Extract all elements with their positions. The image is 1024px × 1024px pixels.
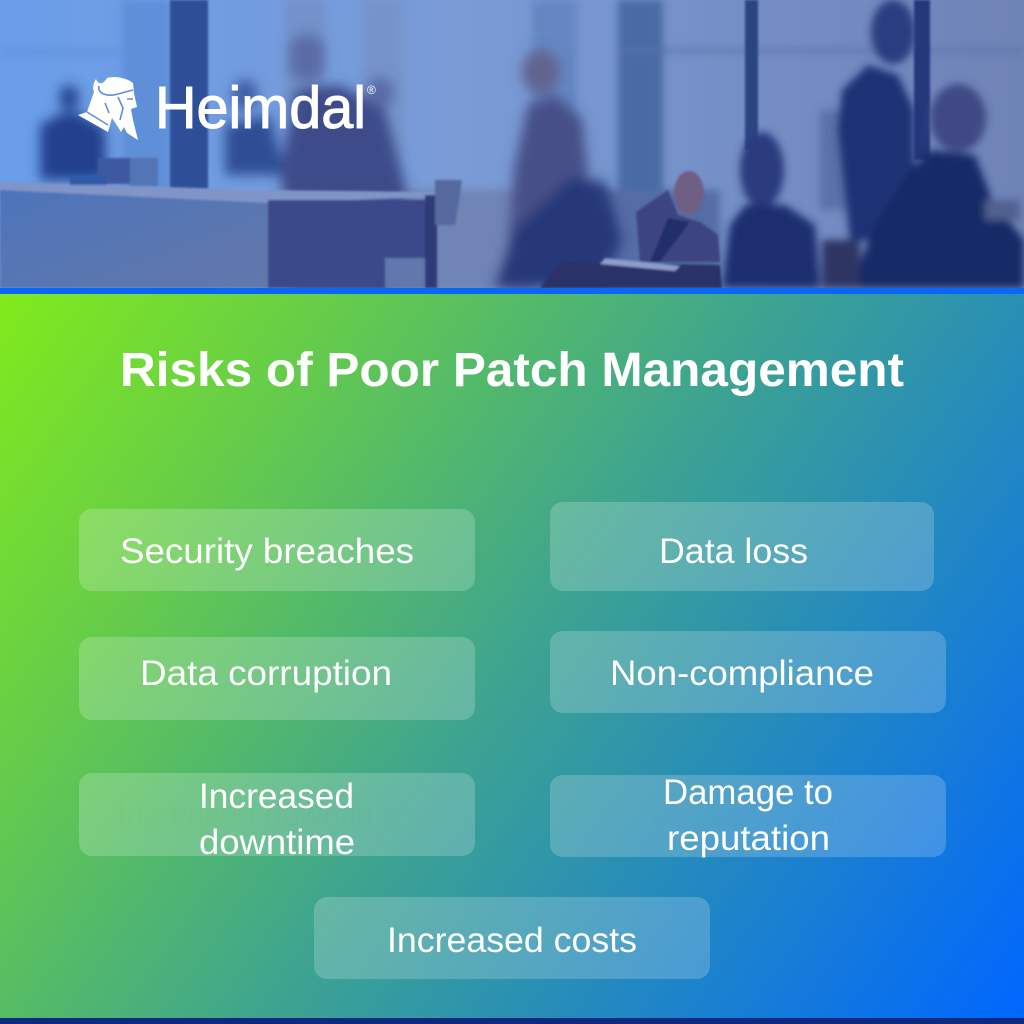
seated man xyxy=(674,171,704,215)
card: Increased downtime: Increased downtime xyxy=(117,795,400,834)
blue divider bar xyxy=(0,288,1024,294)
card: Damage to reputation: Damage to reputation xyxy=(640,805,855,832)
registered mark: ® xyxy=(367,83,376,97)
card: Damage to reputation xyxy=(550,773,946,858)
footer bar xyxy=(0,1018,1024,1024)
tall man xyxy=(871,0,915,64)
card: Non-compliance: Non-compliance xyxy=(610,654,874,693)
card: Data loss: Data loss xyxy=(659,532,808,571)
right foreground man xyxy=(930,84,986,152)
card: Increased downtime: downtime xyxy=(199,823,355,862)
card: Damage to reputation: reputation xyxy=(667,819,830,858)
card: Non-compliance xyxy=(550,631,946,713)
card: Increased downtime xyxy=(79,773,475,862)
card: Damage to reputation: Damage to xyxy=(663,773,833,812)
title: Risks of Poor Patch Management xyxy=(120,344,904,397)
card: Data corruption xyxy=(79,637,475,720)
card: Data loss xyxy=(550,502,934,591)
card: Increased costs xyxy=(314,897,710,979)
card: Security breaches xyxy=(79,509,475,591)
logo: Heimdal xyxy=(78,75,376,141)
woman xyxy=(740,132,784,208)
card: Security breaches: Security breaches xyxy=(120,532,414,571)
wordmark: Heimdal xyxy=(155,75,366,141)
card: Increased downtime: Increased xyxy=(199,777,354,816)
card: Increased costs: Increased costs xyxy=(387,921,637,960)
icon: viking head xyxy=(78,77,138,140)
gradient panel xyxy=(0,294,1024,1018)
background people xyxy=(59,85,79,111)
card: Data corruption: Data corruption xyxy=(140,654,392,693)
header photo: office scene with people xyxy=(0,0,1024,290)
desk left xyxy=(0,188,268,288)
